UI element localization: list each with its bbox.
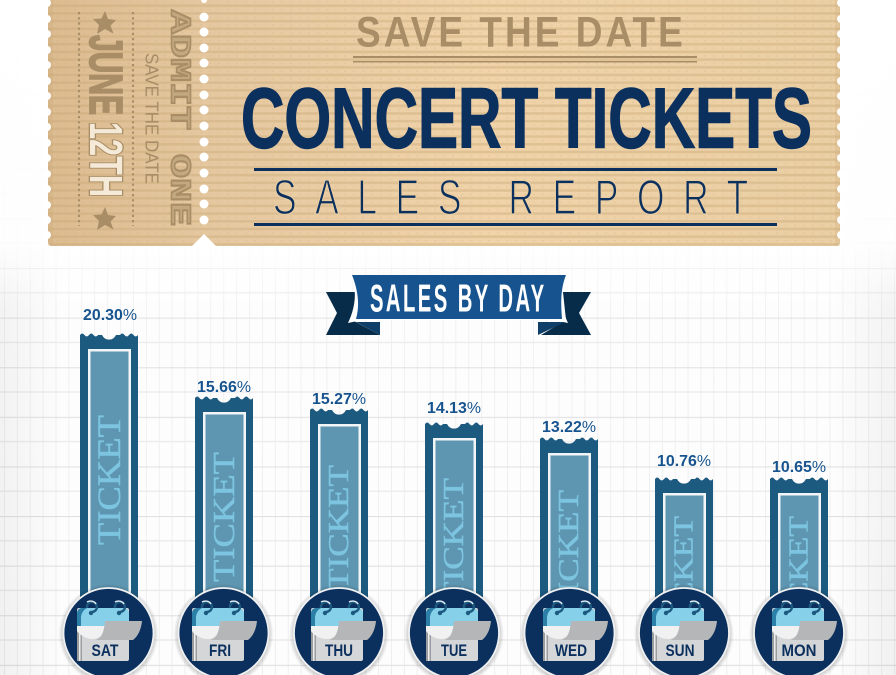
ticket edge scallops [43,0,845,239]
bar: monday 10.65%: 10.65% [772,459,826,476]
panel: ticket header [43,0,845,247]
ticket perforation [191,0,217,247]
icon: calendar TUE [404,584,504,675]
icon: calendar WED [520,584,620,675]
bar: monday 10.65%: TICKET [784,515,814,636]
icon: calendar WED: WED [555,641,587,660]
bar: saturday 20.30%: TICKET [92,415,128,545]
icon: calendar SAT [58,584,158,675]
stub date text: JUNE [80,35,132,115]
icon: calendar MON [749,584,849,675]
icon: calendar FRI: FRI [209,641,231,660]
icon: calendar SUN: SUN [666,641,694,660]
bar: thursday 15.27% [310,391,368,610]
bar: monday 10.65% [770,459,828,636]
save the date rules [353,56,697,62]
icon: calendar MON: MON [782,641,816,660]
title rule bottom [254,223,777,226]
bar: wednesday 13.22%: TICKET [553,490,585,615]
ticket stub dotted lines [79,12,133,226]
bar: sunday 10.76%: 10.76% [657,453,711,470]
icon: star top [93,11,116,34]
bar: tuesday 14.13%: TICKET [438,478,470,603]
bar: tuesday 14.13% [425,400,483,610]
icon: calendar THU [289,584,389,675]
icon: calendar TUE: TUE [441,641,467,660]
bar: wednesday 13.22%: 13.22% [542,419,596,436]
bar: saturday 20.30% [80,307,138,610]
bar: friday 15.66% [195,379,253,610]
stub date text: 12TH [80,122,132,197]
stub admit one: ADMIT ONE [162,10,196,226]
bar: sunday 10.76% [655,453,713,636]
bar: saturday 20.30%: 20.30% [83,307,137,324]
ribbon: sales by day: SALES BY DAY [370,276,544,320]
bar: friday 15.66%: TICKET [206,452,241,582]
bar: wednesday 13.22% [540,419,598,615]
title rule top [254,168,777,171]
icon: calendar FRI [174,584,274,675]
bar: thursday 15.27%: TICKET [323,465,355,590]
subtitle: sales report: SALES REPORT [273,170,748,225]
icon: star bottom [93,207,116,230]
icon: calendar THU: THU [325,641,353,660]
stub save the date: SAVE THE DATE [142,53,162,184]
icon: calendar SUN [634,584,734,675]
bar: sunday 10.76%: TICKET [668,515,698,636]
bar: friday 15.66%: 15.66% [197,379,251,396]
ribbon: sales by day [326,275,591,335]
heading: save the date: SAVE THE DATE [356,9,683,56]
icon: calendar SAT: SAT [92,641,119,660]
bar: thursday 15.27%: 15.27% [312,391,366,408]
bar: tuesday 14.13%: 14.13% [427,400,481,417]
